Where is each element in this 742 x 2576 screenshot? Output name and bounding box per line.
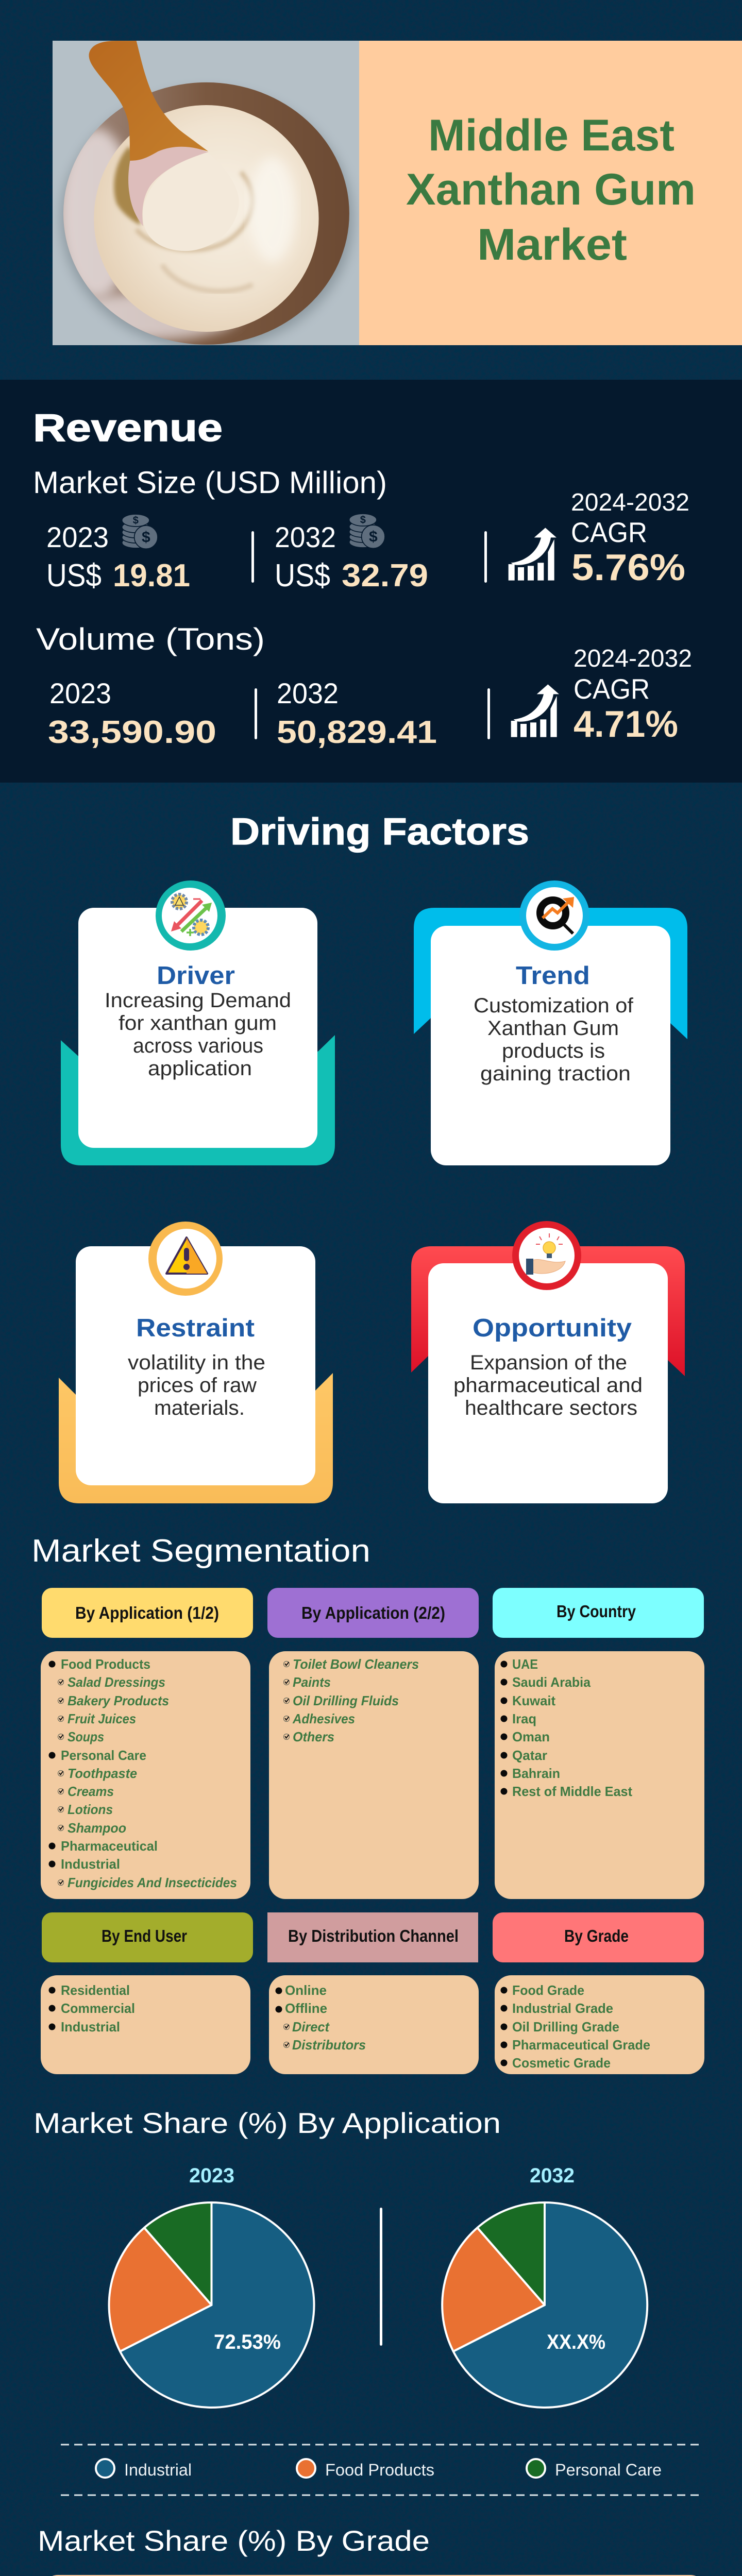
card text: gaining traction — [480, 1062, 631, 1085]
card text — [105, 989, 291, 1080]
card text: products is — [502, 1040, 605, 1062]
list: by grade: Pharmaceutical Grade — [512, 2037, 650, 2053]
stat: market size 2023 — [46, 521, 190, 594]
list: by country — [495, 1651, 704, 1899]
list: by application 1/2: Industrial — [61, 1856, 120, 1872]
header: by end user: By End User — [102, 1926, 187, 1945]
list: by application 1/2: Shampoo — [68, 1820, 126, 1836]
stat: market size 2032: 32.79 — [342, 558, 428, 594]
list: by application 2/2: Adhesives — [292, 1711, 355, 1726]
list: by application 1/2: Bakery Products — [68, 1693, 169, 1708]
list: by application 1/2: Personal Care — [61, 1748, 146, 1763]
list: by country: UAE — [512, 1656, 538, 1672]
hero photo: bowl of xanthan gum powder with wooden spoon — [53, 41, 359, 349]
card text — [128, 1351, 265, 1419]
stat: market size 2032: 2032 — [275, 521, 336, 553]
icon: restraint warning — [148, 1222, 223, 1296]
divider — [484, 531, 487, 583]
card text: for xanthan gum — [119, 1012, 277, 1035]
list: by application 2/2: Toilet Bowl Cleaners — [293, 1656, 419, 1672]
pie chart: 2023: 2023 — [189, 2164, 234, 2187]
pie chart: 2023: 72.53% — [214, 2331, 281, 2353]
list: by application 1/2: Soups — [68, 1729, 104, 1744]
header: by distribution channel: By Distribution Channel — [288, 1926, 459, 1945]
divider — [255, 688, 257, 739]
title text: Xanthan Gum — [406, 165, 696, 214]
divider — [251, 531, 254, 583]
card heading: Driver — [157, 962, 235, 990]
header: by country: By Country — [556, 1602, 636, 1621]
card text: pharmaceutical and — [453, 1374, 643, 1397]
stat: CAGR revenue — [571, 489, 689, 588]
list: by grade — [495, 1975, 704, 2074]
icon: coins 2023 — [122, 514, 158, 549]
card text: Increasing Demand — [105, 989, 291, 1012]
stat: CAGR revenue: 2024-2032 — [571, 489, 689, 516]
divider — [380, 2208, 382, 2346]
heading: volume: Volume (Tons) — [36, 622, 265, 656]
list: by end user — [41, 1975, 250, 2074]
list: by application 1/2: Pharmaceutical — [61, 1838, 158, 1854]
card text: application — [148, 1057, 252, 1080]
list: by application 2/2 — [269, 1651, 479, 1899]
card text: across various — [133, 1035, 263, 1057]
card heading: Opportunity — [473, 1314, 632, 1342]
list: by grade: Food Grade — [512, 1982, 584, 1998]
pie chart: 2032: XX.X% — [547, 2331, 605, 2353]
header: by application 1/2 — [42, 1588, 253, 1638]
heading: market segmentation: Market Segmentation — [31, 1533, 370, 1569]
legend: application: Personal Care — [555, 2461, 662, 2479]
header: by end user — [42, 1912, 253, 1962]
list: by application 1/2: Fruit Juices — [68, 1711, 136, 1726]
list: by country: Bahrain — [512, 1766, 560, 1781]
stat: volume 2032: 2032 — [277, 677, 339, 709]
icon: coins 2023: $ — [133, 515, 139, 527]
legend: application: Industrial — [124, 2461, 192, 2479]
title text — [406, 111, 696, 269]
stat: CAGR volume: 2024-2032 — [574, 645, 692, 672]
list: by application 2/2: Oil Drilling Fluids — [293, 1693, 399, 1708]
list: by distribution channel: Direct — [292, 2019, 330, 2035]
stat: market size 2032: US$ — [275, 558, 330, 594]
card text — [474, 994, 634, 1085]
list: by application 1/2: Food Products — [61, 1656, 150, 1672]
list: by distribution channel: Online — [285, 1982, 327, 1998]
stat: CAGR revenue: CAGR — [571, 516, 647, 548]
card text: Customization of — [474, 994, 634, 1017]
list: by application 1/2: Fungicides And Insecticides — [68, 1875, 237, 1890]
list: by grade: Oil Drilling Grade — [512, 2019, 619, 2035]
legend: application — [96, 2459, 662, 2479]
list: by country: Oman — [512, 1729, 550, 1744]
icon: coins 2032 — [349, 514, 385, 548]
panel: driver — [61, 880, 335, 1165]
list: by grade: Cosmetic Grade — [512, 2055, 611, 2071]
card text — [453, 1351, 643, 1419]
list: by distribution channel: Offline — [285, 2001, 327, 2016]
list: by application 1/2: Creams — [68, 1784, 114, 1799]
list: by application 1/2: Lotions — [68, 1802, 113, 1817]
stat: volume 2023: 2023 — [49, 677, 111, 709]
stat: market size 2023: 19.81 — [113, 558, 190, 594]
header: by distribution channel — [267, 1912, 478, 1962]
list: by distribution channel: Distributors — [292, 2037, 366, 2053]
stat: volume 2032 — [277, 677, 437, 750]
panel: grade charts — [41, 2575, 707, 2576]
card text: prices of raw — [138, 1374, 257, 1397]
header: by application 2/2 — [267, 1588, 479, 1638]
heading: revenue: Revenue — [33, 406, 223, 449]
header: by grade: By Grade — [564, 1926, 629, 1945]
card text: Expansion of the — [470, 1351, 627, 1374]
stat: market size 2023: US$ — [46, 558, 102, 594]
list: by grade: Industrial Grade — [512, 2001, 613, 2016]
list: by application 1/2: Toothpaste — [68, 1766, 137, 1781]
pie chart: 2032 — [442, 2164, 647, 2408]
panel: restraint — [59, 1222, 333, 1503]
icon: trend — [519, 880, 589, 951]
header: by application 2/2: By Application (2/2) — [301, 1603, 445, 1622]
list: by country: Kuwait — [512, 1693, 555, 1708]
list: by application 2/2: Paints — [293, 1674, 331, 1690]
title panel — [359, 41, 742, 345]
card heading: Trend — [516, 962, 590, 990]
panel: opportunity — [411, 1221, 685, 1503]
title text: Market — [477, 220, 627, 269]
list: by end user: Commercial — [61, 2001, 135, 2016]
icon: growth chart revenue — [509, 528, 556, 581]
card text: volatility in the — [128, 1351, 265, 1374]
icon: coins 2032: $ — [369, 529, 378, 546]
list: by application 1/2: Salad Dressings — [68, 1674, 165, 1690]
heading: market share by application: Market Share (%) By Application — [33, 2107, 501, 2139]
list: by end user: Residential — [61, 1982, 130, 1998]
list: by country: Iraq — [512, 1711, 536, 1726]
list: by application 2/2: Others — [293, 1729, 334, 1744]
panel: trend — [414, 880, 687, 1165]
stat: market size 2032 — [275, 521, 428, 594]
list: by country: Qatar — [512, 1748, 547, 1763]
icon: growth chart volume — [511, 684, 559, 737]
pie chart: 2032: 2032 — [530, 2164, 575, 2187]
heading: driving factors: Driving Factors — [230, 811, 529, 853]
header: by application 1/2: By Application (1/2) — [75, 1603, 219, 1622]
stat: CAGR volume: CAGR — [574, 673, 650, 705]
icon: opportunity — [512, 1221, 581, 1290]
card text: Xanthan Gum — [487, 1017, 619, 1040]
header: by grade — [493, 1912, 704, 1962]
heading: market share by grade: Market Share (%) By Grade — [38, 2524, 430, 2557]
heading: market size: Market Size (USD Million) — [33, 465, 387, 500]
icon: coins 2032: $ — [360, 515, 366, 526]
title text: Middle East — [428, 111, 674, 160]
stat: volume 2032: 50,829.41 — [277, 715, 437, 750]
stat: CAGR volume — [574, 645, 692, 745]
legend: application: Food Products — [325, 2461, 434, 2479]
list: by application 1/2 — [41, 1651, 250, 1899]
list: by end user: Industrial — [61, 2019, 120, 2035]
stat: volume 2023: 33,590.90 — [48, 715, 216, 750]
divider — [487, 688, 490, 739]
list: by country: Rest of Middle East — [512, 1784, 632, 1799]
card heading: Restraint — [136, 1314, 255, 1342]
header: by country — [493, 1588, 704, 1638]
list: by country: Saudi Arabia — [512, 1674, 591, 1690]
stat: CAGR revenue: 5.76% — [571, 547, 685, 588]
stat: market size 2023: 2023 — [46, 521, 109, 553]
stat: volume 2023 — [48, 677, 216, 750]
card text: materials. — [154, 1397, 245, 1419]
card text: healthcare sectors — [465, 1397, 637, 1419]
panel: revenue — [0, 380, 742, 783]
stat: CAGR volume: 4.71% — [574, 704, 678, 745]
list: by distribution channel — [269, 1975, 479, 2074]
pie chart: 2023 — [109, 2164, 314, 2408]
icon: driver — [156, 880, 226, 951]
icon: coins 2023: $ — [142, 529, 150, 546]
